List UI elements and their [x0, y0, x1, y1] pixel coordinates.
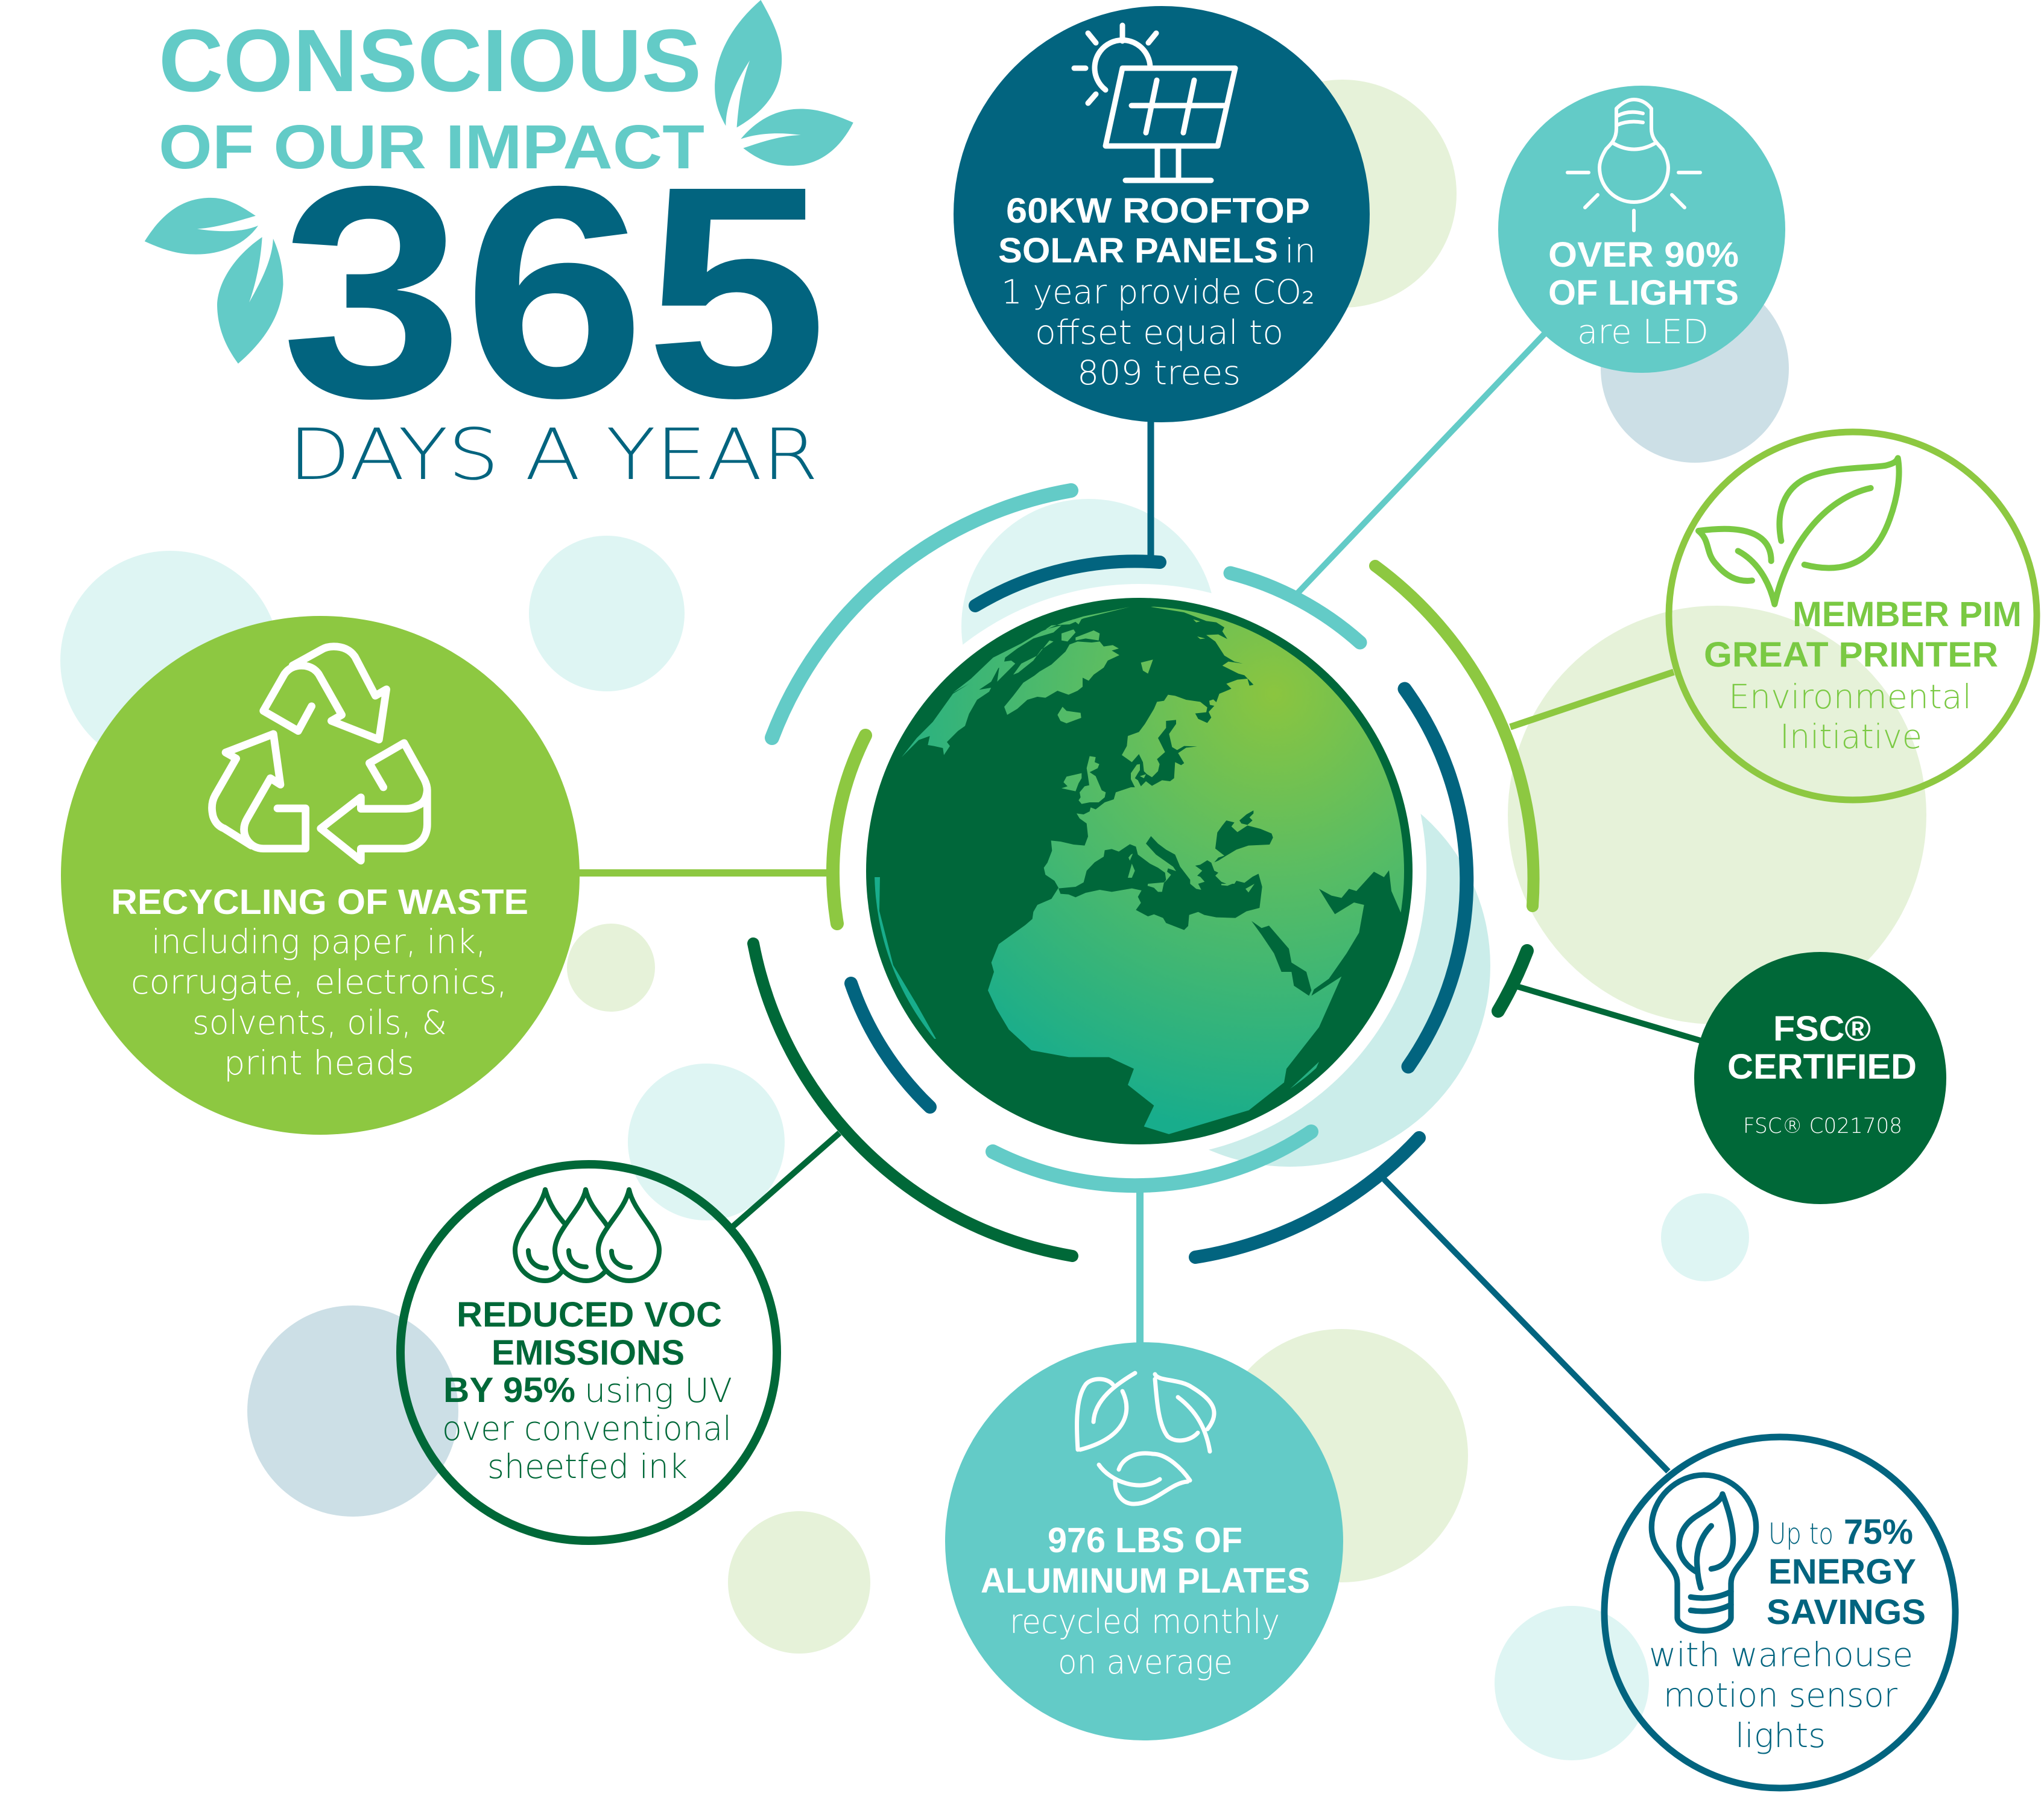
title: conscious: CONSCIOUS — [159, 11, 701, 110]
panel: FSC certified — [1694, 952, 1946, 1204]
aluminum text: on average — [1058, 1643, 1233, 1681]
VOC text: sheetfed ink — [487, 1447, 688, 1486]
panel: LED lights — [1498, 86, 1785, 373]
solar text: SOLAR PANELS — [998, 231, 1278, 270]
panel: solar panels — [954, 6, 1370, 422]
panel: PIM great printer — [1669, 432, 2037, 800]
aluminum text: ALUMINUM PLATES — [981, 1561, 1310, 1600]
recycling text: solvents, oils, & — [192, 1003, 447, 1042]
FSC text — [1727, 1009, 1917, 1138]
FSC text: FSC® — [1773, 1009, 1871, 1048]
globe — [866, 598, 1413, 1144]
aluminum text — [981, 1521, 1310, 1681]
icon: bulb with leaf — [1651, 1475, 1756, 1631]
LED text: are LED — [1577, 312, 1709, 351]
panel: reduced VOC emissions — [400, 1164, 777, 1541]
recycling text: RECYCLING OF WASTE — [111, 883, 528, 922]
PIM text: Initiative — [1780, 717, 1922, 756]
FSC text: FSC® C021708 — [1743, 1114, 1902, 1138]
PIM text — [1704, 595, 2022, 756]
icon: sprout leaves — [1698, 458, 1899, 604]
energy text: Up to — [1768, 1517, 1834, 1551]
PIM text: Environmental — [1729, 677, 1972, 716]
recycling text — [111, 883, 528, 1082]
solar text: 1 year provide CO₂ — [1001, 273, 1315, 311]
energy text: 75% — [1844, 1512, 1913, 1552]
solar text: offset equal to — [1035, 313, 1283, 352]
VOC text: using UV — [584, 1371, 732, 1410]
recycling text: including paper, ink, — [151, 922, 486, 961]
connector lines — [573, 331, 1703, 1471]
solar text: 60KW ROOFTOP — [1006, 191, 1310, 230]
energy text: motion sensor — [1663, 1676, 1897, 1714]
energy text: SAVINGS — [1767, 1593, 1926, 1632]
solar text: 809 trees — [1077, 354, 1241, 392]
panel: recycling of waste — [61, 616, 580, 1135]
VOC text: REDUCED VOC — [457, 1295, 722, 1334]
icon: three leaves — [1077, 1373, 1214, 1504]
LED text: OVER 90% — [1548, 235, 1739, 274]
panel: energy savings — [1604, 1437, 1955, 1788]
panel: aluminum plates — [945, 1342, 1343, 1740]
LED text — [1548, 235, 1739, 351]
LED text: OF LIGHTS — [1548, 273, 1739, 312]
FSC text: CERTIFIED — [1727, 1047, 1917, 1086]
recycling text: print heads — [224, 1044, 414, 1082]
solar text: in — [1285, 232, 1316, 270]
energy text — [1649, 1512, 1926, 1755]
icon: light bulb — [1568, 100, 1700, 230]
energy text: lights — [1735, 1716, 1826, 1755]
VOC text — [442, 1295, 732, 1486]
VOC text: EMISSIONS — [492, 1333, 685, 1372]
energy text: ENERGY — [1768, 1552, 1916, 1591]
icon: recycling arrows — [212, 647, 427, 861]
title: days a year: DAYS A YEAR — [288, 413, 818, 496]
title: 365: 365 — [281, 123, 827, 460]
title: of our impact: OF OUR IMPACT — [159, 112, 704, 182]
icon: title leaves — [145, 0, 853, 364]
VOC text: over conventional — [442, 1409, 732, 1448]
solar text — [998, 191, 1316, 392]
PIM text: MEMBER PIM — [1792, 595, 2022, 634]
title block — [145, 0, 853, 496]
icon: solar panel and sun — [1074, 25, 1235, 180]
aluminum text: 976 LBS OF — [1048, 1521, 1242, 1560]
recycling text: corrugate, electronics, — [131, 963, 507, 1001]
VOC text: BY 95% — [443, 1371, 575, 1410]
orbit arcs around globe — [753, 490, 1534, 1257]
aluminum text: recycled monthly — [1010, 1602, 1280, 1641]
icon: water drops — [515, 1190, 659, 1281]
energy text: with warehouse — [1649, 1635, 1913, 1674]
PIM text: GREAT PRINTER — [1704, 635, 1998, 674]
